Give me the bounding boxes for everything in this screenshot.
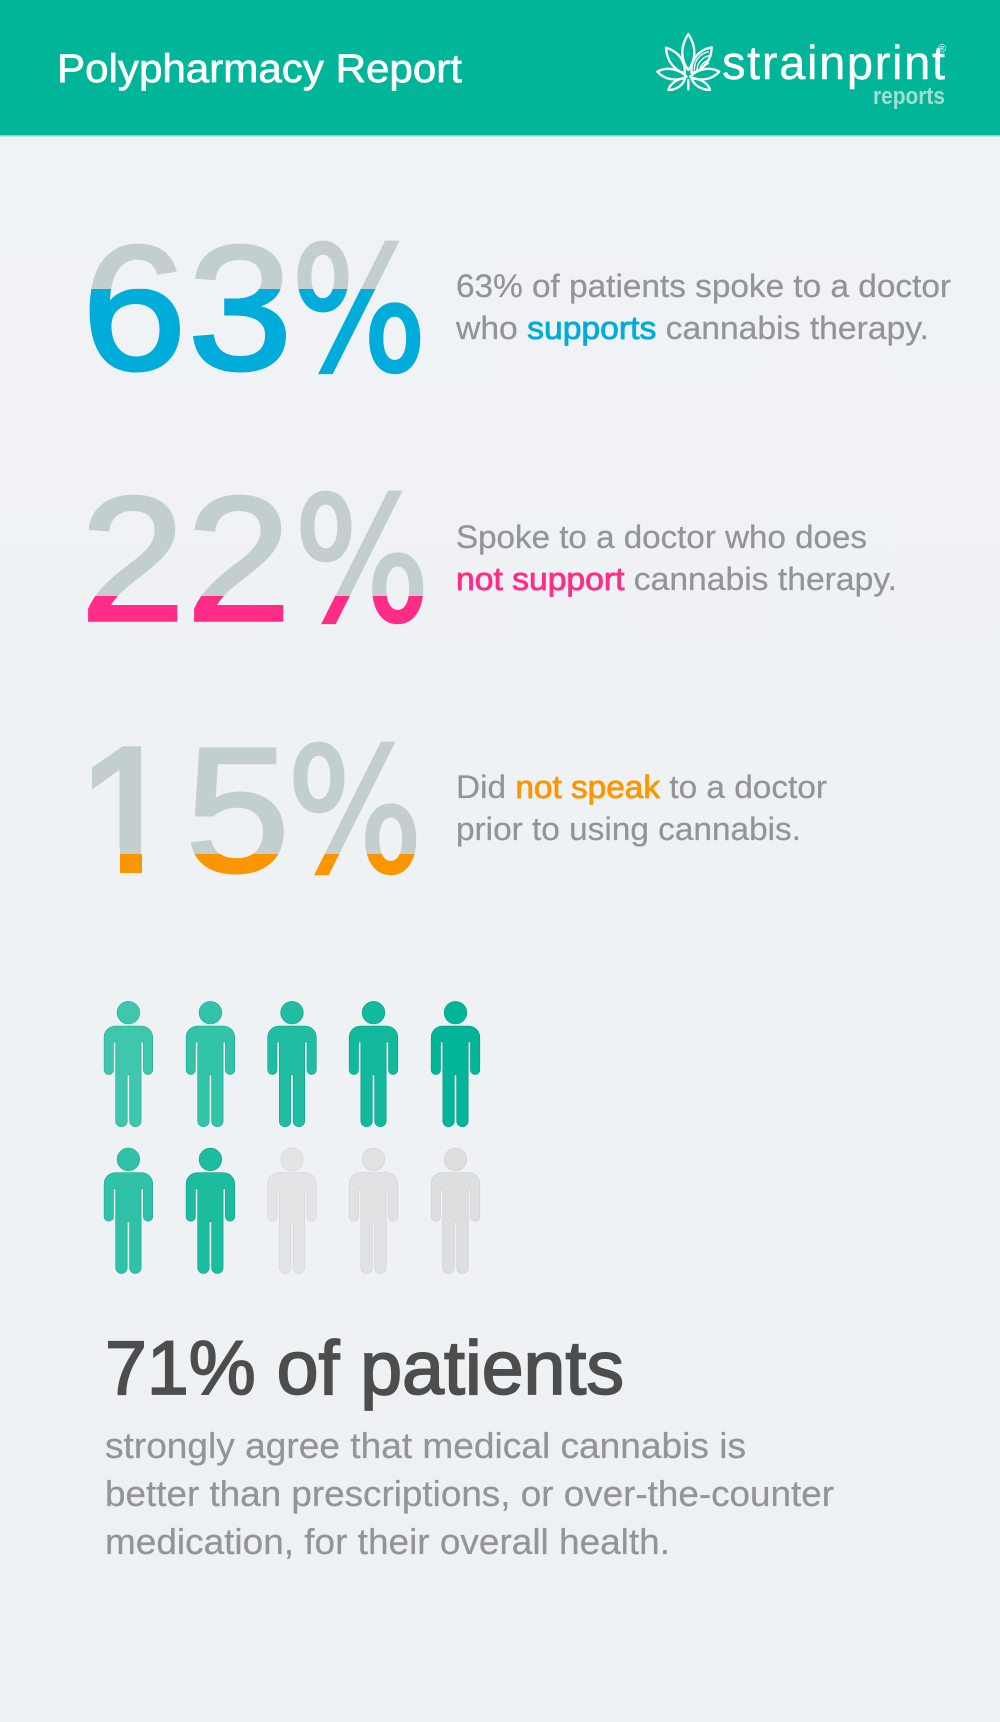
- big number 22% grey: 2: [80, 460, 185, 658]
- header band: [0, 0, 1000, 136]
- big number 63% blue fill: [90, 289, 420, 374]
- body paragraph: strongly agree that medical cannabis is: [105, 1425, 746, 1466]
- big number 15% orange fill: %: [287, 712, 423, 912]
- person 9: [349, 1148, 398, 1273]
- description: [455, 268, 951, 346]
- big number 63% grey: %: [291, 211, 427, 411]
- big number 15% grey: [92, 742, 416, 876]
- reports sublabel: reports: [873, 83, 945, 110]
- big number 22% grey: %: [294, 461, 430, 661]
- person 8: [268, 1148, 316, 1273]
- big number 15% orange fill: [120, 854, 414, 876]
- title: Polypharmacy Report: [57, 47, 462, 91]
- big number 15% grey: 5: [186, 711, 290, 909]
- big number 22% pink fill: 2: [80, 460, 185, 658]
- row 1: [104, 1001, 480, 1127]
- description: [456, 769, 827, 847]
- big number 63% blue fill: 3: [188, 209, 292, 407]
- big number 22% grey: 2: [186, 460, 291, 658]
- big number 22% pink fill: 2: [186, 460, 291, 658]
- big number 15% orange fill: 1: [78, 711, 176, 909]
- description: prior to using cannabis.: [456, 811, 801, 847]
- body paragraph: medication, for their overall health.: [105, 1521, 670, 1562]
- registered mark: ®: [938, 43, 946, 55]
- person 7: [186, 1148, 235, 1273]
- pictogram: 7 of 10 people highlighted: [104, 1001, 480, 1273]
- stat: 15%: [92, 742, 827, 876]
- big number 15% orange fill: 5: [186, 711, 290, 909]
- wordmark: strainprint: [722, 36, 945, 89]
- big number 15% grey: 1: [78, 711, 176, 909]
- description: 63% of patients spoke to a doctor: [456, 268, 951, 304]
- person 5: [431, 1001, 480, 1127]
- icon: cannabis leaf with fingerprint: [657, 34, 719, 90]
- body paragraph: better than prescriptions, or over-the-counter: [105, 1473, 834, 1514]
- person 10: [431, 1148, 480, 1273]
- stat: 22%: [88, 490, 894, 624]
- big number 63% grey: [82, 209, 427, 411]
- body paragraph: [105, 1425, 834, 1562]
- row 2: [104, 1148, 480, 1273]
- big number 15% grey: %: [287, 712, 423, 912]
- big number 22% pink fill: [88, 596, 423, 624]
- person 6: [104, 1148, 153, 1273]
- big number 63% grey: 6: [82, 209, 186, 407]
- big number 22% grey: [80, 460, 430, 661]
- description: Spoke to a doctor who does: [456, 519, 867, 555]
- description: not support cannabis therapy.: [456, 561, 897, 597]
- headline: 71% of patients: 71% of patients: [105, 1326, 624, 1411]
- big number 63% blue fill: %: [291, 211, 427, 411]
- big number 63% grey: 3: [188, 209, 292, 407]
- description: who supports cannabis therapy.: [455, 310, 929, 346]
- person 3: [268, 1001, 316, 1127]
- description: Did not speak to a doctor: [456, 769, 827, 805]
- person 4: [349, 1001, 398, 1127]
- person 2: [186, 1001, 235, 1127]
- stat: 63%: [90, 240, 951, 374]
- logo: strainprint reports: [657, 34, 946, 110]
- person 1: [104, 1001, 153, 1127]
- big number 63% blue fill: 6: [82, 209, 186, 407]
- big number 22% pink fill: %: [294, 461, 430, 661]
- description: [456, 519, 897, 597]
